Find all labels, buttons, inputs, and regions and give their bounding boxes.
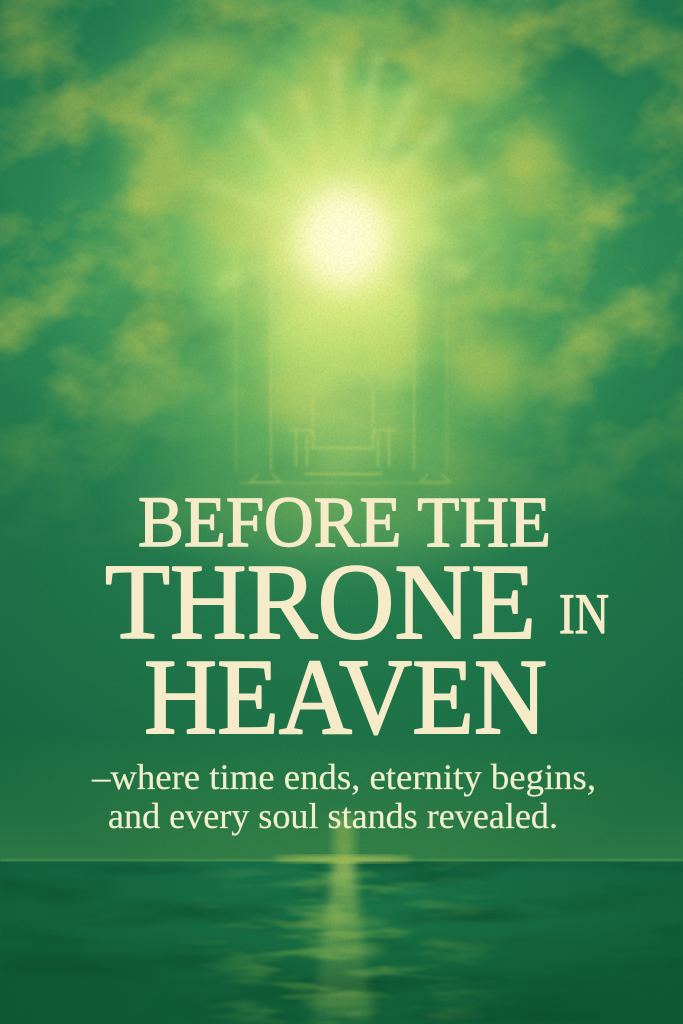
subtitle [91,757,596,836]
horizon glow [0,815,683,862]
pillar edge highlights [236,238,450,482]
light reflection path [208,862,492,1024]
title word: in: IN [559,583,609,646]
sea [0,858,683,1024]
title line: before the: BEFORE THE [138,482,551,562]
throne [240,359,447,483]
title line: throne: THRONE [105,543,536,662]
subtitle line two: and every soul stands revealed. [108,796,558,836]
yellow cloud masses [131,34,562,404]
subtitle line one: –where time ends, eternity begins, [91,757,596,797]
title line: heaven: HEAVEN [144,638,547,757]
pillars [240,250,446,475]
light rays [205,50,486,290]
title [105,482,609,757]
central glow [168,63,518,470]
throne room: pillars and throne [236,238,450,483]
